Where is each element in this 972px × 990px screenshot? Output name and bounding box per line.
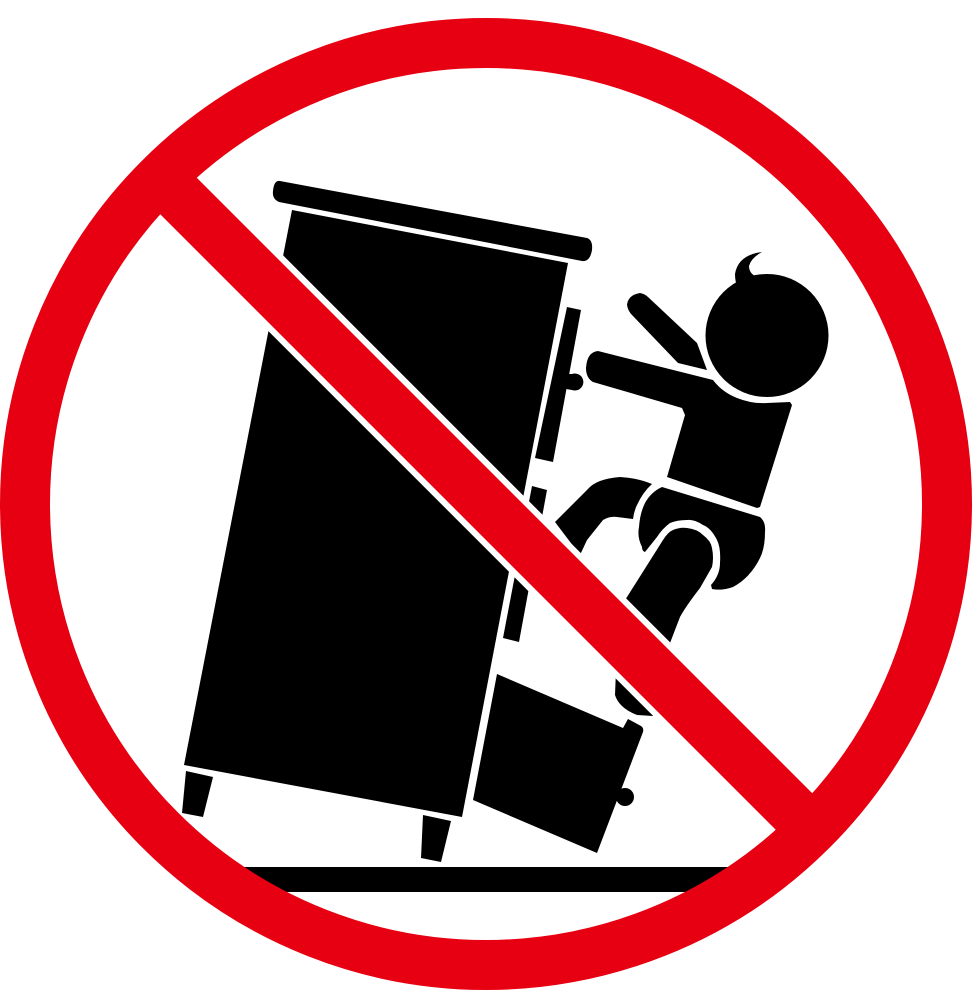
head bbox=[706, 274, 828, 397]
wardrobe right leg bbox=[421, 815, 451, 862]
wardrobe body bbox=[184, 210, 568, 817]
icon: climbing child bbox=[555, 252, 828, 716]
wardrobe top bbox=[273, 181, 592, 261]
front leg bbox=[620, 528, 713, 655]
hair curl bbox=[735, 252, 762, 287]
back leg bbox=[555, 477, 652, 555]
upper handle bbox=[560, 374, 583, 390]
arm and torso bbox=[586, 351, 792, 508]
upper door strip bbox=[535, 307, 581, 462]
floor line bbox=[240, 867, 735, 892]
middle door strip bbox=[503, 486, 547, 642]
red diagonal bar bbox=[165, 182, 815, 832]
drawer handle bbox=[616, 788, 634, 806]
wardrobe left leg bbox=[182, 771, 213, 817]
raised arm bbox=[627, 293, 707, 370]
diaper bbox=[638, 487, 765, 590]
white bar edge bbox=[165, 182, 815, 832]
foot bbox=[615, 670, 662, 716]
open drawer bbox=[473, 674, 643, 853]
icon: wardrobe bbox=[182, 181, 643, 862]
